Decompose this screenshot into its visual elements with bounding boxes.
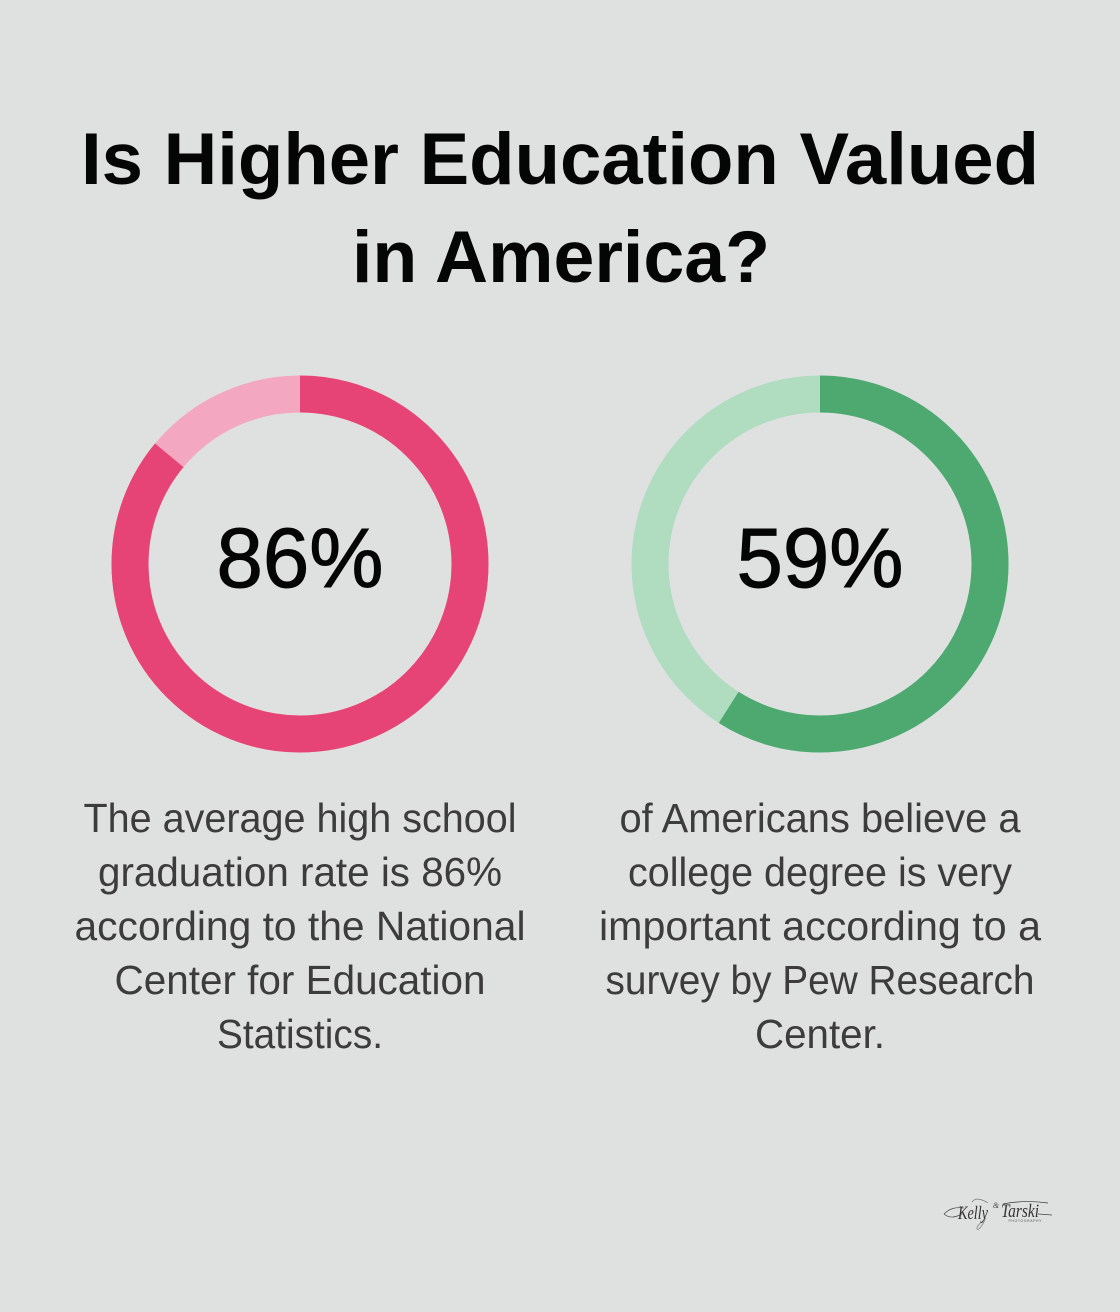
text block: college degree description: survey by Pew Research [606,957,1034,1003]
panel: high school graduation rate [74,394,526,1057]
donut chart: 59%: 59% [736,511,904,605]
donut chart: 59% [650,394,990,734]
text block: college degree description: of Americans believe a [620,795,1021,841]
text block: college degree description [599,795,1041,1057]
title [81,119,1039,298]
text block: graduation rate description: Center for Education [114,957,486,1003]
logo: photography signature: PHOTOGRAPHY [1008,1219,1042,1223]
donut chart: 86% [130,394,470,734]
logo: photography signature: & [993,1201,1000,1210]
logo: photography signature: Kelly [957,1203,988,1224]
title: Is Higher Education Valued [81,119,1039,200]
text block: graduation rate description: graduation rate is 86% [98,849,502,895]
text block: graduation rate description: Statistics. [217,1011,383,1057]
text block: graduation rate description: according to the National [74,903,526,949]
text block: college degree description: important according to a [599,903,1041,949]
text block: graduation rate description [74,795,526,1057]
title: in America? [352,217,770,298]
logo: photography signature: Tarski [1001,1201,1039,1222]
text block: graduation rate description: The average high school [84,795,516,841]
panel: value of a college degree [599,394,1041,1057]
donut chart: 86%: 86% [216,511,384,605]
text block: college degree description: Center. [755,1011,885,1057]
logo: photography signature [944,1199,1052,1229]
text block: college degree description: college degree is very [628,849,1012,895]
